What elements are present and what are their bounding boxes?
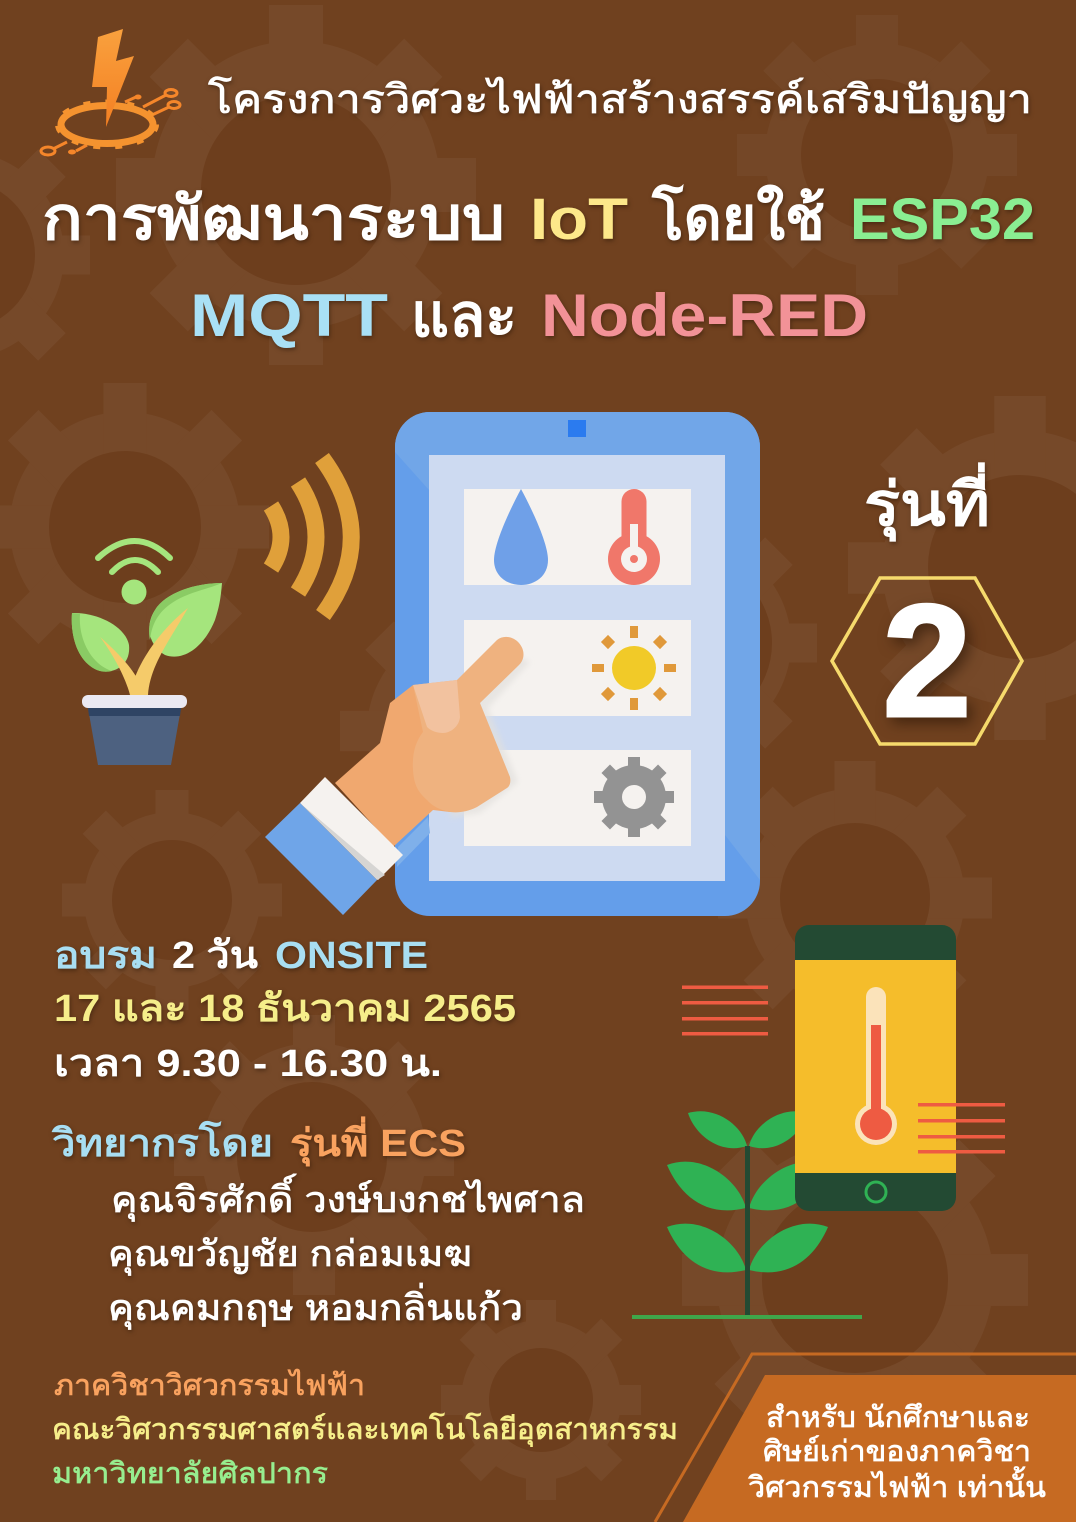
audience callout: ศิษย์เก่าของภาควิชา bbox=[763, 1435, 1031, 1468]
training schedule: เวลา 9.30 - 16.30 น. bbox=[54, 1043, 442, 1085]
badge: batch number 2: 2 bbox=[883, 571, 971, 750]
course title: MQTT bbox=[190, 282, 388, 349]
course title bbox=[42, 183, 1035, 349]
heat lines left bbox=[682, 986, 768, 1036]
speakers: คุณคมกฤษ หอมกลิ่นแก้ว bbox=[108, 1283, 523, 1330]
course title: Node-RED bbox=[541, 282, 868, 349]
speakers: รุ่นพี่ ECS bbox=[290, 1116, 466, 1167]
course title: และ bbox=[411, 282, 517, 349]
row: humidity and temperature bbox=[464, 489, 691, 585]
department credits: มหาวิทยาลัยศิลปากร bbox=[52, 1458, 328, 1490]
badge: batch number 2 bbox=[832, 571, 1022, 750]
audience callout: สำหรับ นักศึกษาและ bbox=[766, 1402, 1030, 1434]
course title: IoT bbox=[530, 187, 628, 252]
speakers: คุณจิรศักดิ์ วงษ์บงกชไพศาล bbox=[111, 1173, 585, 1222]
thermometer bbox=[855, 987, 897, 1145]
icon: wireless signal arcs bbox=[271, 458, 351, 615]
department credits: คณะวิศวกรรมศาสตร์และเทคโนโลยีอุตสาหกรรม bbox=[52, 1412, 678, 1447]
logo bbox=[41, 29, 180, 155]
course title: ESP32 bbox=[850, 187, 1035, 252]
row: sun bbox=[464, 620, 691, 716]
audience callout: วิศวกรรมไฟฟ้า เท่านั้น bbox=[748, 1466, 1046, 1504]
training schedule: ONSITE bbox=[275, 935, 428, 977]
label: batch: รุ่นที่ bbox=[864, 462, 990, 542]
course title: โดยใช้ bbox=[651, 183, 825, 252]
department credits bbox=[52, 1368, 678, 1490]
department credits: ภาควิชาวิศวกรรมไฟฟ้า bbox=[54, 1368, 365, 1402]
heat lines right bbox=[918, 1103, 1005, 1154]
phone with thermometer bbox=[795, 925, 956, 1211]
training schedule: 17 และ 18 ธันวาคม 2565 bbox=[54, 988, 516, 1030]
home button bbox=[866, 1182, 886, 1202]
training schedule bbox=[54, 935, 516, 1085]
icon: plant bbox=[632, 1111, 862, 1319]
tablet bbox=[395, 412, 760, 916]
icon: plant with wifi bbox=[72, 541, 222, 765]
hand pointing at tablet bbox=[265, 637, 530, 915]
row: settings gear bbox=[464, 750, 691, 846]
speakers: วิทยากรโดย bbox=[51, 1120, 273, 1165]
training schedule: อบรม bbox=[54, 935, 157, 977]
speakers bbox=[51, 1116, 585, 1330]
course title: การพัฒนาระบบ bbox=[42, 185, 505, 252]
project name heading: โครงการวิศวะไฟฟ้าสร้างสรรค์เสริมปัญญา bbox=[208, 77, 1032, 122]
speakers: คุณขวัญชัย กล่อมเมฆ bbox=[108, 1233, 472, 1276]
audience callout bbox=[655, 1354, 1076, 1522]
training schedule: 2 วัน bbox=[172, 935, 258, 977]
